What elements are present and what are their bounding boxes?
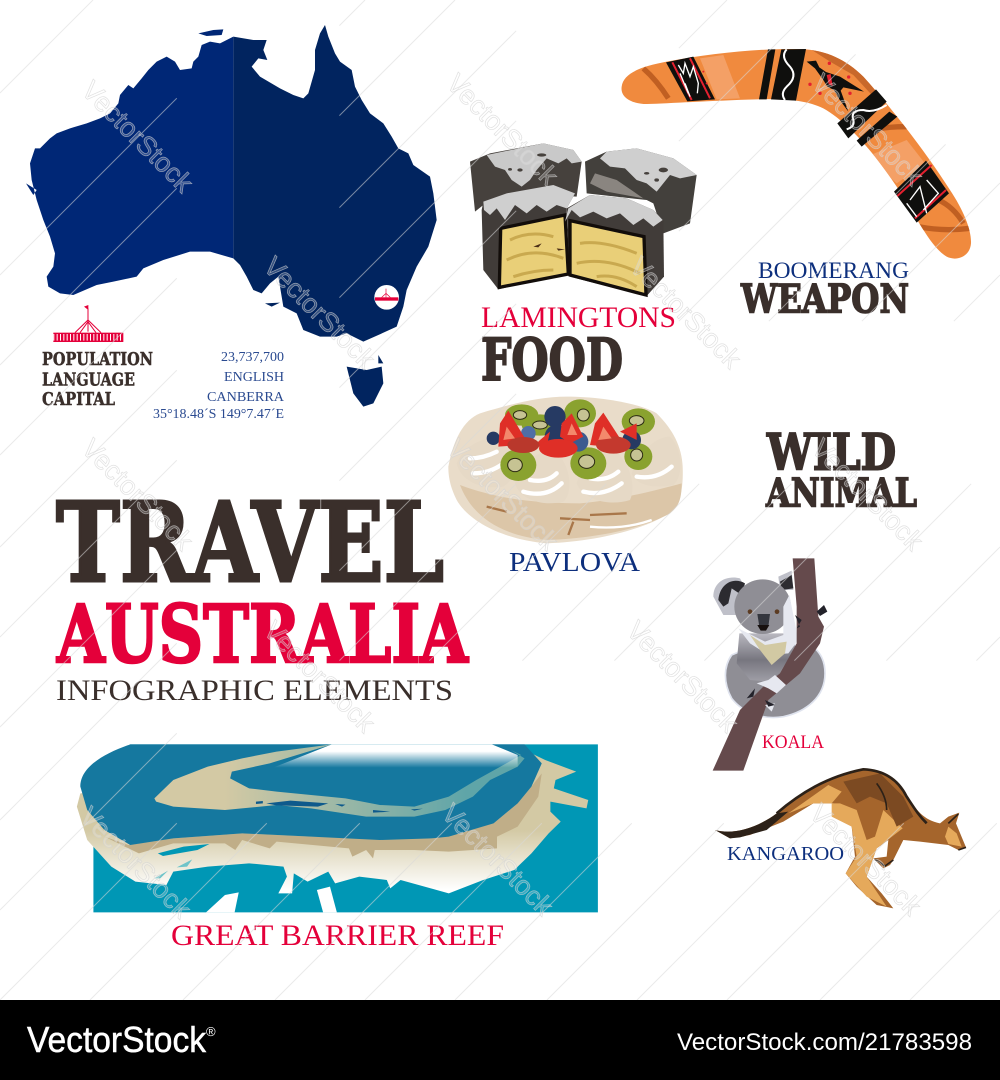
heading: food: FOOD (481, 326, 623, 394)
icing drips on back cakes (508, 153, 668, 182)
back left icing (487, 143, 582, 187)
watermark overlay: VectorStock (621, 615, 744, 738)
koala face (748, 609, 779, 631)
watermark overlay: VectorStock (76, 433, 199, 556)
footer bar (0, 1000, 1000, 1080)
watermark overlay: VectorStock (436, 798, 559, 921)
boomerang body (622, 49, 971, 259)
registered mark: ® (206, 1024, 216, 1039)
capital value: CANBERRA (207, 390, 285, 405)
fact labels: POPULATION (42, 349, 153, 370)
illustration: kangaroo (715, 769, 966, 908)
koala body (725, 640, 825, 718)
haze (273, 744, 518, 768)
inner island (154, 744, 525, 817)
cream dollops (457, 437, 680, 503)
kangaroo dark fur (843, 773, 913, 827)
koala chest fur (738, 595, 798, 655)
watermark overlay: VectorStock (804, 798, 927, 921)
capital label: CAPITAL (42, 389, 115, 410)
panel: Australia map (26, 25, 437, 407)
illustration: great barrier reef (77, 744, 598, 912)
illustration: koala (713, 558, 827, 771)
shallow patches (158, 844, 209, 856)
back right icing (600, 148, 697, 192)
label: pavlova: PAVLOVA (509, 547, 641, 577)
front left cake (482, 185, 575, 289)
language label: LANGUAGE (42, 370, 135, 390)
illustration: pavlova (448, 397, 683, 543)
back left cake (470, 143, 582, 212)
kangaroo light fur (788, 785, 903, 907)
label: great barrier reef: GREAT BARRIER REEF (171, 919, 504, 952)
illustration: lamingtons (470, 143, 697, 296)
kangaroo motif (807, 61, 864, 112)
dark slivers (256, 801, 423, 813)
Canberra marker (374, 285, 399, 310)
label: koala: KOALA (762, 732, 824, 753)
label: lamingtons: LAMINGTONS (481, 301, 676, 334)
language value: ENGLISH (224, 370, 284, 385)
label: boomerang: BOOMERANG (758, 258, 909, 283)
map east half (233, 25, 437, 407)
fruit topping (487, 399, 655, 481)
heading: animal: ANIMAL (765, 470, 917, 516)
boomerang shading (643, 47, 970, 230)
main title: travel: TRAVEL (56, 478, 444, 607)
reef sand (77, 748, 588, 893)
subtitle: INFOGRAPHIC ELEMENTS (56, 674, 453, 707)
sea (93, 744, 598, 912)
main title: australia: AUSTRALIA (56, 587, 469, 681)
coordinates: 35°18.48´S 149°7.47´E (153, 407, 284, 422)
kangaroo dark back (777, 769, 927, 823)
meringue base (448, 397, 683, 543)
pattern bands (666, 49, 949, 223)
koala paws (757, 675, 786, 712)
icon: parliament house (53, 305, 123, 342)
watermark overlay: VectorStock (258, 251, 381, 374)
tree trunk (713, 558, 824, 771)
sand band (104, 773, 542, 858)
heading: wild: WILD (766, 422, 896, 482)
koala head (734, 579, 791, 634)
label: kangaroo: KANGAROO (727, 843, 844, 865)
watermark overlay: VectorStock (76, 75, 199, 198)
watermark overlay: VectorStock (441, 68, 564, 191)
watermark overlay: VectorStock (258, 615, 381, 738)
population value: 23,737,700 (221, 350, 284, 365)
map west half (26, 29, 233, 295)
lower sand islets (206, 892, 239, 912)
watermark overlay: VectorStock (806, 68, 929, 191)
back right cake (585, 148, 697, 233)
illustration: boomerang (622, 47, 971, 259)
koala ears (713, 571, 793, 615)
heading: weapon: WEAPON (740, 276, 909, 322)
deep lagoon (80, 744, 542, 845)
kangaroo silhouette (715, 769, 966, 908)
watermark overlay: VectorStock (74, 801, 197, 924)
watermark overlay: VectorStock (624, 251, 747, 374)
watermark overlay: VectorStock (806, 433, 929, 556)
footer brand: VectorStock (27, 1019, 207, 1060)
watermark overlay: VectorStock (441, 433, 564, 556)
footer url: VectorStock.com/21783598 (677, 1029, 972, 1056)
front right cake (567, 195, 664, 296)
